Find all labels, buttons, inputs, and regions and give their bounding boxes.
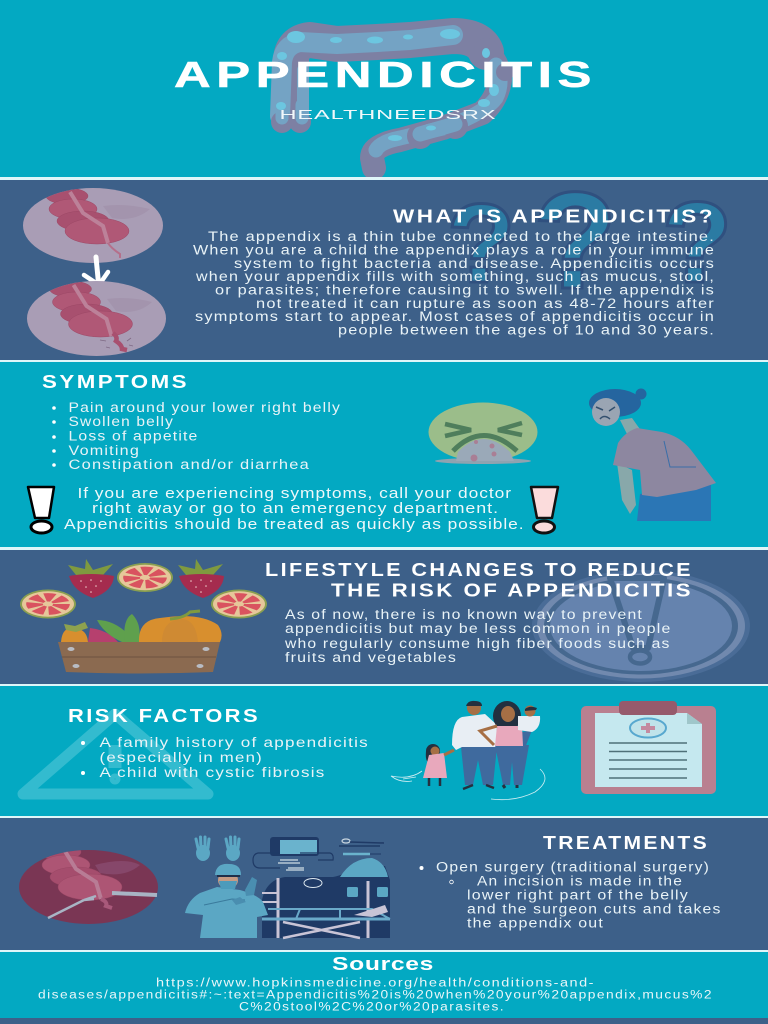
heading: SYMPTOMS (42, 372, 189, 392)
text block: definition: The appendix is a thin tube connected to the large intestine. (208, 229, 715, 244)
panel: what is appendicitis (0, 164, 768, 360)
list: symptoms: Swollen belly (68, 414, 174, 429)
list: symptoms (52, 400, 341, 472)
callout: seek care: Appendicitis should be treated as quickly as possible. (64, 516, 524, 533)
text block: definition: system to fight bacteria and disease. Appendicitis occurs (234, 256, 715, 271)
text block: prevention: appendicitis but may be less common in people (285, 621, 672, 636)
text block: definition (193, 229, 715, 338)
text block: prevention: As of now, there is no known way to prevent (285, 607, 643, 622)
text block: prevention: who regularly consume high fiber foods such as (284, 636, 670, 651)
list: symptoms: Constipation and/or diarrhea (68, 457, 310, 472)
icon: question marks background: ? (662, 179, 732, 307)
callout: seek care: If you are experiencing symptoms, call your doctor (78, 485, 512, 502)
list: risk factors: A child with cystic fibrosis (100, 765, 326, 780)
illustration: ruptured appendix (27, 281, 166, 356)
list: risk factors (81, 735, 369, 780)
list: risk factors: A family history of appendicitis (100, 735, 369, 750)
illustration: surgeon (185, 864, 268, 938)
text block: source link: C%20stool%2C%20or%20parasites. (239, 1002, 505, 1014)
title: APPENDICITIS (174, 54, 597, 95)
icon: vomiting face (428, 402, 538, 464)
list: treatments: lower right part of the belly (467, 888, 689, 902)
text block: source link (38, 978, 713, 1014)
icon: question marks background (447, 164, 732, 318)
text block: definition: or parasites; therefore causing it to swell. If the appendix is (215, 282, 715, 298)
illustration: operating room (253, 837, 390, 938)
list: treatments: Open surgery (traditional surgery) (436, 860, 710, 874)
illustration: family (391, 701, 545, 800)
text block: prevention: fruits and vegetables (285, 650, 457, 665)
text block: definition: when your appendix fills with something, such as mucus, stool, (195, 269, 715, 284)
heading: WHAT IS APPENDICITIS? (393, 206, 715, 226)
illustration: appendix removal (19, 844, 158, 924)
heading: THE RISK OF APPENDICITIS (331, 580, 693, 600)
icon: warning triangle background (23, 714, 208, 794)
arrow: progression (84, 257, 108, 285)
icon: question marks background: ? (447, 181, 515, 306)
illustration: fruits (20, 559, 267, 618)
list: treatments: and the surgeon cuts and takes (467, 902, 722, 916)
list: symptoms: Pain around your lower right belly (68, 400, 341, 415)
list: symptoms: Vomiting (68, 443, 140, 458)
panel: header (0, 0, 768, 178)
callout: seek care (64, 485, 524, 533)
icon: clipboard (581, 701, 716, 794)
illustration: vegetable crate (58, 611, 222, 674)
text block: definition: people between the ages of 10 and 30 years. (338, 322, 715, 338)
panel: symptoms (0, 362, 768, 547)
icon: exclamation circle background (532, 570, 750, 682)
heading: LIFESTYLE CHANGES TO REDUCE (265, 560, 693, 580)
heading: TREATMENTS (543, 833, 709, 853)
subtitle: HEALTHNEEDSRX (280, 107, 496, 122)
panel: sources (0, 952, 768, 1018)
icon: exclamation right (531, 487, 558, 533)
heading: RISK FACTORS (68, 706, 260, 726)
text block: definition: not treated it can rupture as soon as 48-72 hours after (256, 296, 715, 311)
panel: treatments (0, 818, 768, 950)
icon: question marks background: ? (533, 164, 617, 318)
list: treatments: the appendix out (467, 916, 604, 930)
panel: risk factors (0, 686, 768, 816)
text block: prevention (284, 607, 672, 665)
text block: definition: symptoms start to appear. Most cases of appendicitis occur in (195, 309, 715, 324)
callout: seek care: right away or go to an emergency department. (92, 500, 499, 517)
text block: source link: https://www.hopkinsmedicine.org/health/conditions-and- (156, 978, 595, 990)
illustration: large intestine (271, 29, 514, 168)
list: symptoms: Loss of appetite (68, 428, 198, 444)
icon: exclamation left (28, 487, 54, 533)
illustration: healthy appendix (23, 188, 163, 263)
heading (265, 560, 693, 600)
list: treatments: An incision is made in the (477, 874, 683, 888)
icon: gloves (196, 837, 240, 861)
list: treatments (420, 860, 722, 930)
text block: source link: diseases/appendicitis#:~:text=Appendicitis%20is%20when%20your%20appendix,mucus%2 (38, 990, 713, 1002)
illustration: sick person (589, 388, 716, 521)
text block: definition: When you are a child the appendix plays a role in your immune (193, 242, 715, 258)
list: risk factors: (especially in men) (100, 750, 263, 765)
heading: Sources (332, 954, 434, 974)
panel: lifestyle changes (0, 550, 768, 684)
